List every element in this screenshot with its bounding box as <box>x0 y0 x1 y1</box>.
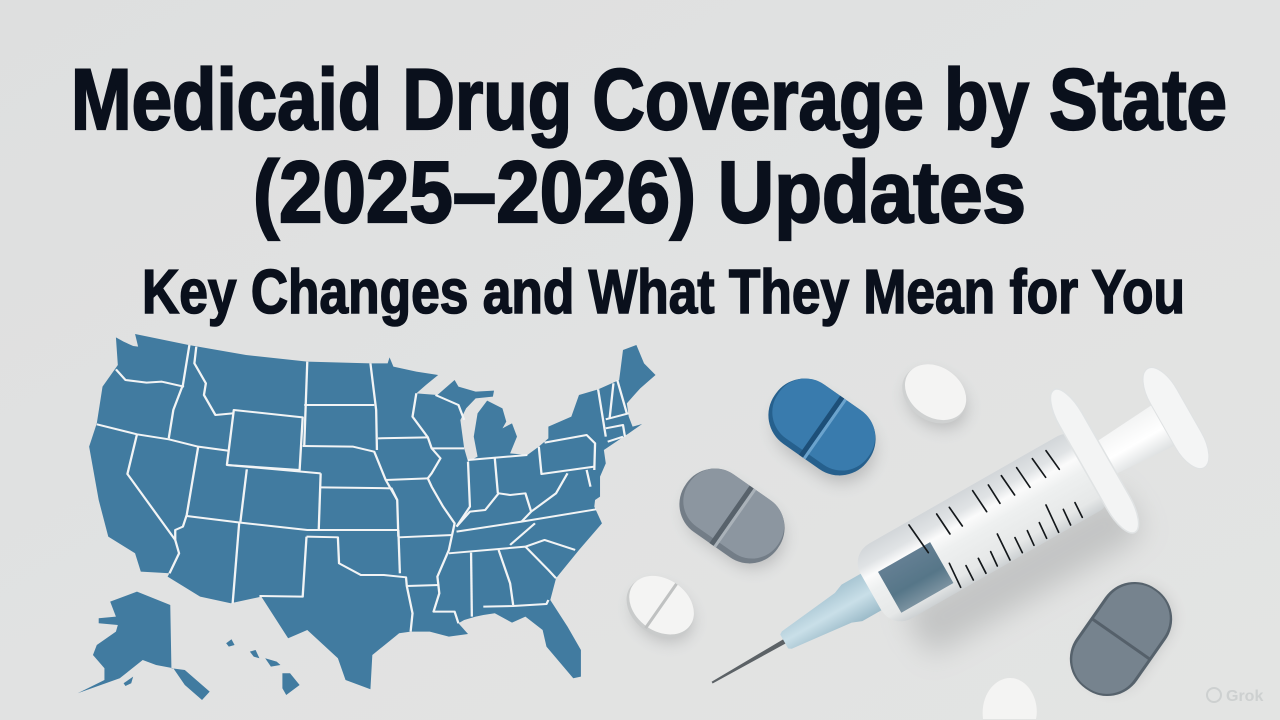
syringe liquid <box>878 542 953 613</box>
syringe needle <box>711 635 792 685</box>
watermark <box>1207 688 1263 705</box>
map: contiguous states silhouette <box>89 334 656 689</box>
title line 2: (2025–2026) Updates <box>253 144 1026 241</box>
pill: white top <box>890 352 981 439</box>
syringe barrel <box>850 426 1118 629</box>
title <box>71 52 1227 241</box>
syringe graduation marks <box>909 451 1082 587</box>
pill: white bottom <box>983 678 1037 719</box>
illustration: syringe <box>670 337 1232 720</box>
syringe rear flange <box>1135 361 1217 475</box>
syringe body <box>670 337 1232 720</box>
map: United States <box>78 334 656 700</box>
syringe front flange <box>1043 383 1146 539</box>
illustration: pills <box>614 352 1186 719</box>
map: Alaska <box>78 592 210 700</box>
watermark text: Grok <box>1226 688 1263 705</box>
pill: blue <box>752 365 893 495</box>
pill: white left <box>614 563 708 652</box>
pill: gray <box>665 455 801 580</box>
syringe plunger rod <box>1083 399 1185 485</box>
map: state borders <box>97 345 629 632</box>
pill: dark gray <box>1056 568 1186 710</box>
map: Hawaii <box>226 639 300 695</box>
syringe shadow <box>902 485 1146 658</box>
syringe hub <box>774 574 881 660</box>
watermark icon <box>1207 688 1221 702</box>
